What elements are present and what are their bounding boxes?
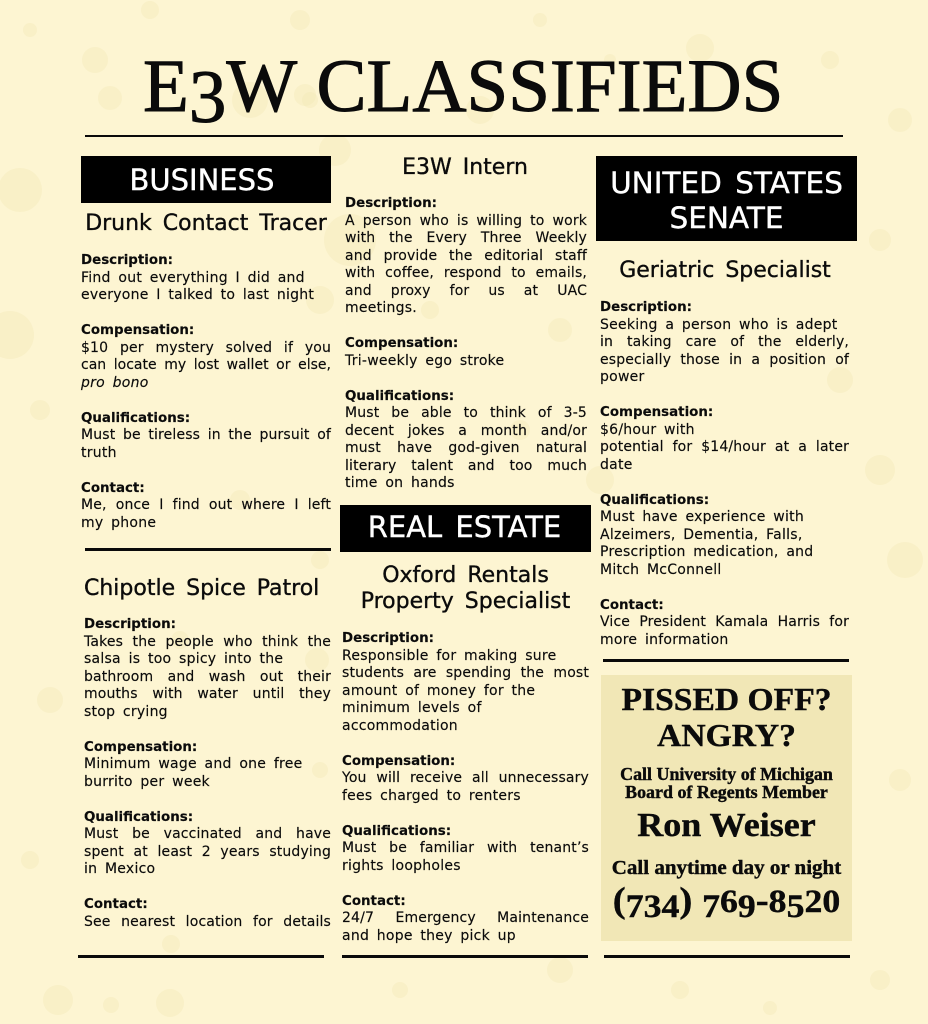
- job text: oxford rentals property specialist: Qualifications:: [342, 824, 451, 838]
- job text: oxford rentals property specialist: amount of money for the: [342, 682, 535, 698]
- job text: geriatric specialist: Must have experience with: [600, 509, 804, 525]
- advertisement: ron weiser: [601, 675, 852, 941]
- job text: chipotle spice patrol: Contact:: [84, 897, 148, 912]
- job title: drunk contact tracer: Drunk Contact Tracer: [85, 210, 327, 236]
- job text: drunk contact tracer: Description:: [81, 253, 173, 268]
- job text: geriatric specialist: $6/hour with: [600, 422, 695, 438]
- job text: geriatric specialist: especially those in a position of: [600, 352, 849, 368]
- job title: oxford rentals property specialist: Property Specialist: [361, 589, 570, 614]
- job text: e3w intern: decent jokes a month and/or: [345, 422, 587, 438]
- job text: chipotle spice patrol: Takes the people who think the: [84, 634, 331, 650]
- job title: oxford rentals property specialist: Oxford Rentals: [382, 563, 549, 588]
- job text: e3w intern: and provide the editorial staff: [345, 248, 587, 264]
- job text: chipotle spice patrol: See nearest location for details: [84, 914, 331, 930]
- title: E3W CLASSIFIEDS: [143, 45, 783, 138]
- section header: united states senate: [596, 156, 857, 241]
- job text: e3w intern: must have god-given natural: [345, 440, 587, 456]
- section header: united states senate: UNITED STATES: [610, 166, 843, 200]
- job text: oxford rentals property specialist: 24/7 Emergency Maintenance: [342, 910, 589, 926]
- ad headline: ANGRY?: [657, 717, 796, 753]
- job text: chipotle spice patrol: stop crying: [84, 704, 168, 720]
- job title: geriatric specialist: Geriatric Specialist: [619, 258, 831, 282]
- job text: oxford rentals property specialist: and hope they pick up: [342, 928, 516, 944]
- job text: geriatric specialist: Mitch McConnell: [600, 562, 721, 578]
- job text: oxford rentals property specialist: [342, 631, 589, 944]
- job text: chipotle spice patrol: in Mexico: [84, 861, 155, 877]
- section header: real estate: REAL ESTATE: [368, 510, 561, 544]
- job text: geriatric specialist: date: [600, 456, 633, 472]
- job text: e3w intern: with the Every Three Weekly: [345, 230, 587, 246]
- job text: drunk contact tracer: Qualifications:: [81, 410, 190, 426]
- ad subhead: Call University of Michigan: [620, 764, 833, 784]
- job text: e3w intern: A person who is willing to work: [345, 212, 587, 228]
- job text: oxford rentals property specialist: fees charged to renters: [342, 788, 521, 804]
- job text: e3w intern: literary talent and too much: [345, 458, 587, 474]
- job text: oxford rentals property specialist: Description:: [342, 631, 434, 646]
- job text: geriatric specialist: more information: [600, 632, 729, 648]
- job text: chipotle spice patrol: spent at least 2 years studying: [84, 844, 331, 860]
- job text: oxford rentals property specialist: You will receive all unnecessary: [342, 770, 589, 786]
- job text: oxford rentals property specialist: students are spending the most: [342, 665, 589, 681]
- job text: drunk contact tracer: truth: [81, 444, 117, 460]
- job text: oxford rentals property specialist: Must be familiar with tenant’s: [342, 840, 589, 856]
- job title: oxford rentals property specialist: [361, 563, 570, 614]
- job text: chipotle spice patrol: Description:: [84, 617, 176, 632]
- job text: oxford rentals property specialist: rights loopholes: [342, 858, 461, 874]
- job text: e3w intern: meetings.: [345, 300, 417, 316]
- job text: drunk contact tracer: $10 per mystery solved if you: [81, 340, 331, 356]
- job text: chipotle spice patrol: mouths with water until they: [84, 686, 331, 702]
- job text: geriatric specialist: power: [600, 369, 645, 385]
- job text: e3w intern: Compensation:: [345, 336, 458, 351]
- section header: real estate: [340, 505, 591, 552]
- job text: geriatric specialist: potential for $14/hour at a later: [600, 439, 849, 455]
- job text: drunk contact tracer: Me, once I find out where I left: [81, 497, 331, 513]
- ad name: Ron Weiser: [637, 807, 816, 844]
- ad headline: [621, 681, 832, 753]
- job text: chipotle spice patrol: Must be vaccinated and have: [84, 826, 331, 842]
- job text: geriatric specialist: in taking care of the elderly,: [600, 334, 849, 350]
- job text: chipotle spice patrol: [84, 617, 331, 930]
- job text: chipotle spice patrol: burrito per week: [84, 774, 210, 790]
- job text: drunk contact tracer: can locate my lost wallet or else,: [81, 357, 331, 373]
- job text: geriatric specialist: [600, 300, 850, 648]
- section header: united states senate: SENATE: [670, 201, 783, 235]
- job text: e3w intern: Must be able to think of 3-5: [345, 405, 587, 421]
- job text: e3w intern: and proxy for us at UAC: [345, 282, 587, 298]
- job text: geriatric specialist: Qualifications:: [600, 492, 709, 508]
- ad call line: Call anytime day or night: [612, 857, 841, 879]
- job text: oxford rentals property specialist: accommodation: [342, 718, 458, 734]
- job text: e3w intern: time on hands: [345, 475, 455, 491]
- ad headline: PISSED OFF?: [621, 681, 832, 717]
- job text: drunk contact tracer: Contact:: [81, 480, 145, 496]
- job text: geriatric specialist: Prescription medication, and: [600, 544, 813, 560]
- job text: geriatric specialist: Compensation:: [600, 405, 713, 420]
- job text: e3w intern: Description:: [345, 196, 437, 211]
- job text: chipotle spice patrol: salsa is too spicy into the: [84, 651, 283, 667]
- job text: drunk contact tracer: Must be tireless in the pursuit of: [81, 427, 331, 443]
- job text: drunk contact tracer: Find out everything I did and: [81, 270, 305, 286]
- job text: drunk contact tracer: my phone: [81, 514, 156, 530]
- job text: drunk contact tracer: Compensation:: [81, 323, 194, 338]
- ad subhead: [620, 764, 833, 802]
- job text: e3w intern: with coffee, respond to emails,: [345, 265, 587, 281]
- job title: chipotle spice patrol: Chipotle Spice Patrol: [84, 576, 319, 600]
- job text: oxford rentals property specialist: minimum levels of: [342, 700, 482, 716]
- job text: chipotle spice patrol: Qualifications:: [84, 810, 193, 824]
- job text: drunk contact tracer: everyone I talked to last night: [81, 287, 314, 303]
- job text: geriatric specialist: Description:: [600, 300, 692, 315]
- ad subhead: Board of Regents Member: [625, 782, 828, 802]
- job text: chipotle spice patrol: Minimum wage and one free: [84, 756, 302, 772]
- job text: chipotle spice patrol: Compensation:: [84, 740, 197, 754]
- job text: geriatric specialist: Vice President Kamala Harris for: [600, 614, 849, 630]
- section header: business: BUSINESS: [130, 163, 274, 197]
- job text: chipotle spice patrol: bathroom and wash out their: [84, 668, 331, 684]
- ad phone number: (734) 769-8520: [613, 880, 840, 925]
- job text: oxford rentals property specialist: Responsible for making sure: [342, 648, 556, 664]
- job text: drunk contact tracer: pro bono: [81, 374, 149, 390]
- job text: e3w intern: Tri-weekly ego stroke: [345, 352, 504, 368]
- job text: geriatric specialist: Contact:: [600, 598, 664, 612]
- section header: business: [81, 156, 331, 203]
- job text: geriatric specialist: Alzeimers, Dementia, Falls,: [600, 526, 803, 542]
- job text: e3w intern: Qualifications:: [345, 388, 454, 404]
- job text: geriatric specialist: Seeking a person who is adept: [600, 316, 837, 332]
- job text: oxford rentals property specialist: Compensation:: [342, 754, 455, 768]
- job text: drunk contact tracer: [80, 253, 332, 530]
- job text: oxford rentals property specialist: Contact:: [342, 894, 406, 908]
- job title: e3w intern: E3W Intern: [402, 154, 528, 180]
- job text: e3w intern: [344, 196, 588, 491]
